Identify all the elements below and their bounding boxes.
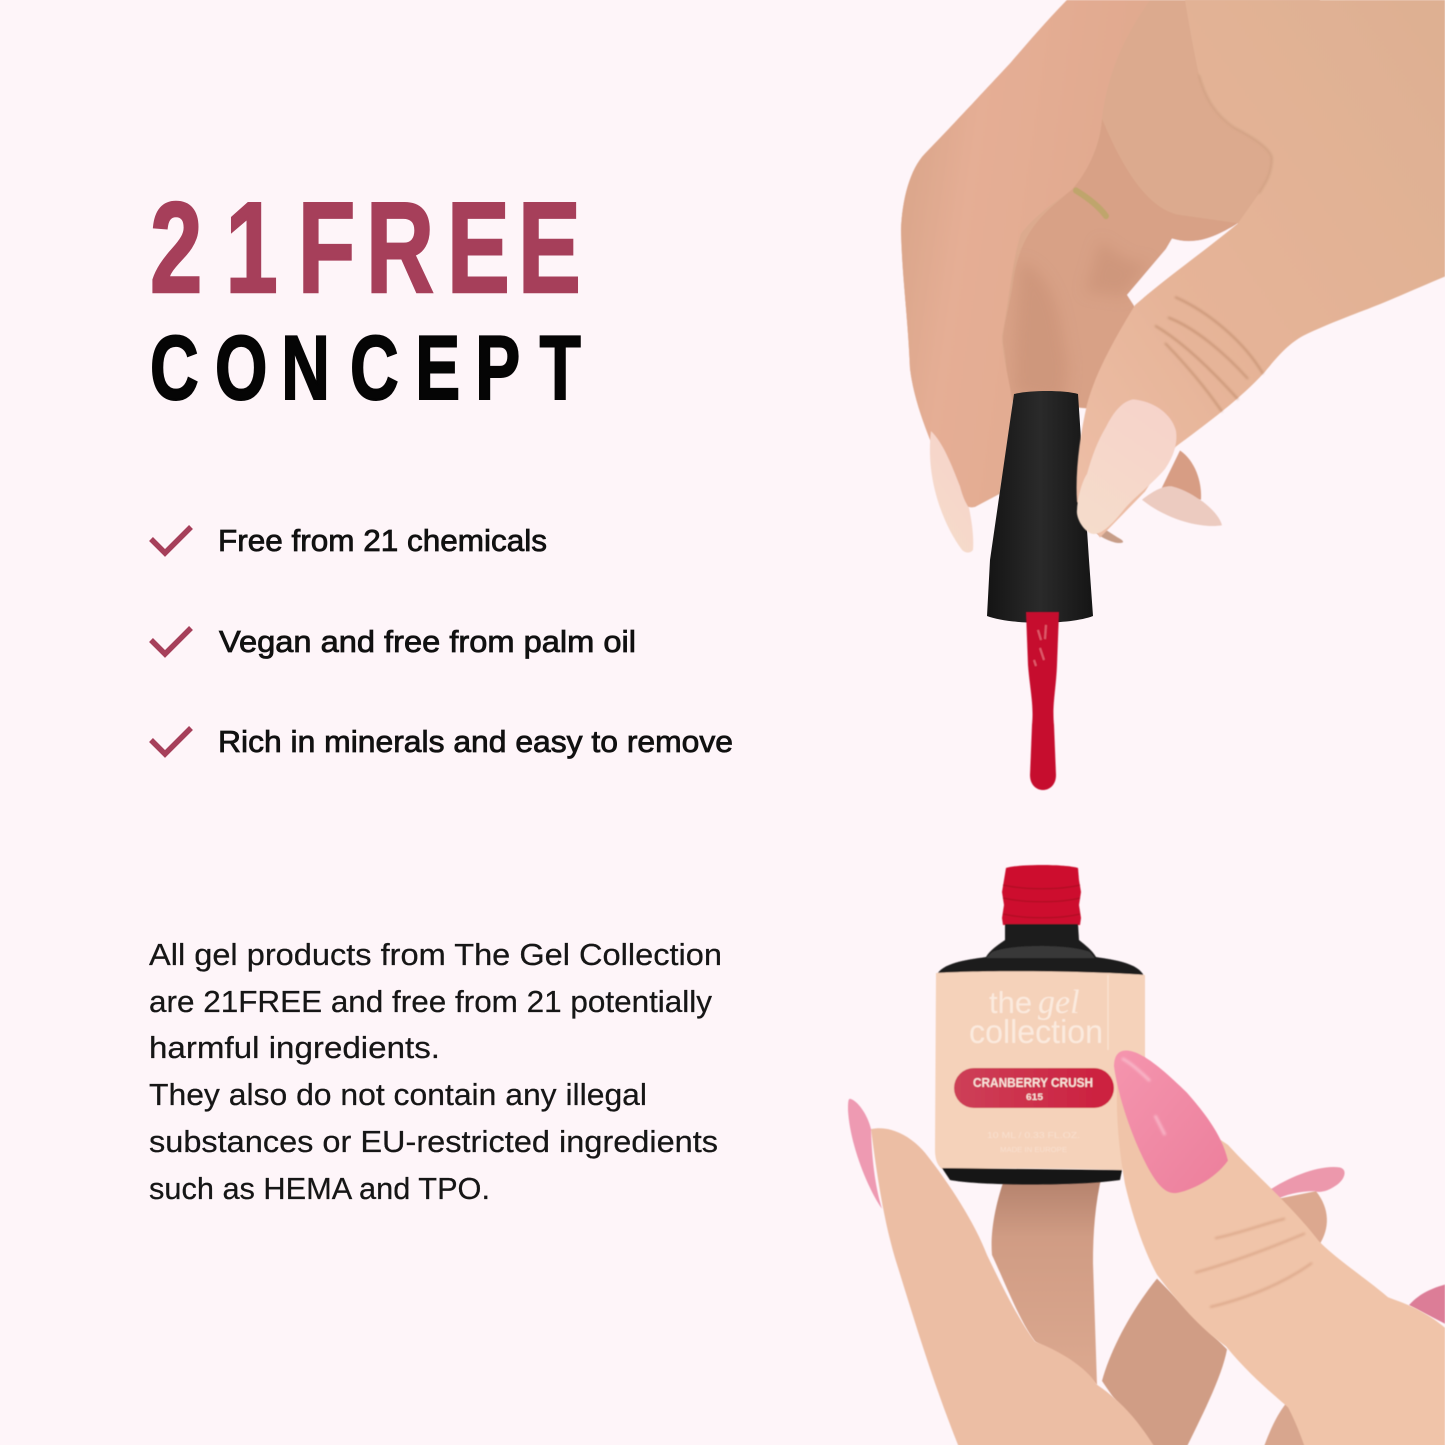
palm — [901, 0, 1320, 507]
bottle label — [935, 971, 1145, 1170]
body paragraph: They also do not contain any illegal — [149, 1077, 647, 1112]
bottle base — [942, 1168, 1122, 1184]
volume text: 10 ML / 0.33 FL.OZ. — [987, 1131, 1080, 1140]
hand creases — [1155, 75, 1272, 412]
bottom hand: back fingers — [992, 1167, 1445, 1445]
body paragraph: such as HEMA and TPO. — [149, 1171, 490, 1206]
index finger — [901, 0, 1150, 507]
index fingernail — [930, 431, 973, 553]
left finger with pink nail — [848, 1099, 1165, 1445]
shade name pill: 615 — [1026, 1092, 1044, 1103]
body paragraph: harmful ingredients. — [149, 1030, 440, 1065]
top hand: thumb and wrist — [1077, 0, 1445, 538]
nail polish brush — [1026, 612, 1059, 790]
inner curled fingers — [1003, 119, 1238, 410]
volume text — [987, 1131, 1080, 1154]
bottle shoulder — [936, 924, 1144, 976]
rear finger behind thumb — [1272, 1191, 1327, 1245]
brand logo: gel — [1038, 984, 1080, 1021]
check item: vegan: Vegan and free from palm oil — [219, 624, 636, 659]
label seam — [1107, 975, 1109, 1050]
body paragraph: are 21FREE and free from 21 potentially — [149, 984, 712, 1019]
brand logo: the — [989, 985, 1032, 1020]
gap between fingers and thumb — [1127, 223, 1238, 307]
check item: rich in minerals: Rich in minerals and easy to remove — [218, 724, 733, 759]
body paragraph — [149, 937, 722, 1206]
far right pink nail — [1409, 1284, 1445, 1324]
brand logo — [969, 984, 1103, 1050]
rear right finger — [1258, 1399, 1320, 1445]
thumb creases — [1195, 1219, 1312, 1307]
benefit list — [151, 523, 733, 759]
brush cap — [987, 391, 1093, 623]
ring finger — [1102, 1279, 1227, 1445]
middle finger — [992, 1174, 1102, 1385]
body paragraph: substances or EU-restricted ingredients — [149, 1124, 718, 1159]
check item: free from 21 chemicals: Free from 21 chemicals — [218, 523, 547, 558]
body paragraph: All gel products from The Gel Collection — [149, 937, 722, 972]
rear pink nail — [1268, 1167, 1345, 1202]
bottle neck — [1002, 865, 1081, 925]
pink thumbnail — [1114, 1051, 1228, 1193]
title: 21FREE: 21FREE — [150, 175, 581, 319]
thumbnail — [1077, 399, 1176, 534]
volume text: MADE IN EUROPE — [1000, 1147, 1067, 1154]
gel polish bottle — [935, 865, 1145, 1184]
top hand: palm and fingers — [901, 0, 1320, 553]
thumb with pink nail — [1114, 1051, 1445, 1445]
palm shadows — [1014, 241, 1150, 404]
ring — [1076, 190, 1106, 216]
back nails behind thumb — [1091, 451, 1222, 543]
shade name pill — [954, 1068, 1114, 1108]
subtitle: CONCEPT: CONCEPT — [150, 317, 581, 418]
brand logo: collection — [969, 1013, 1103, 1050]
shade name pill: CRANBERRY CRUSH — [973, 1075, 1093, 1090]
